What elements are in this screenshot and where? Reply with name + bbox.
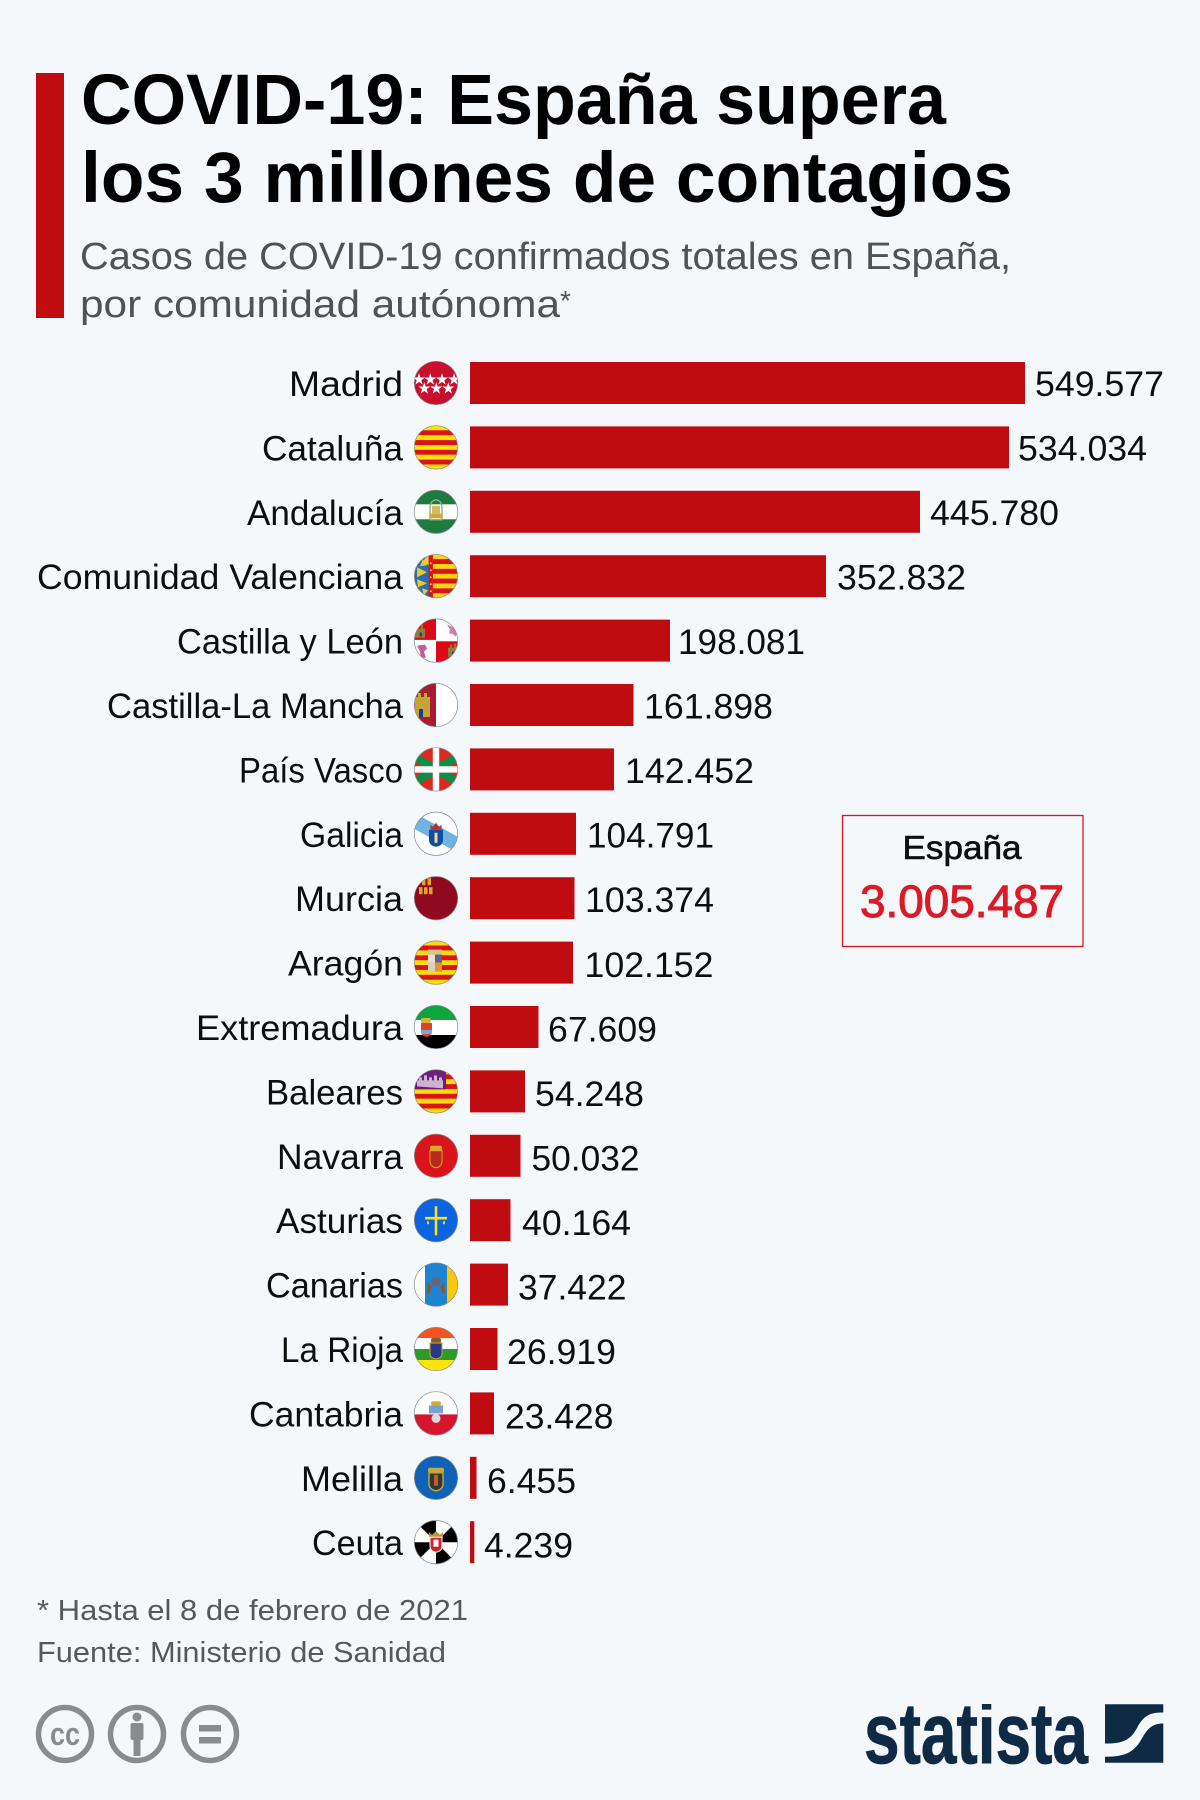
row: Asturias: [276, 1198, 631, 1243]
row: La Rioja: [281, 1327, 616, 1372]
bar: Castilla-La Mancha: [470, 684, 634, 726]
value: Cataluña: 534.034: [1018, 430, 1147, 468]
subtitle: por comunidad autónoma: [80, 284, 561, 326]
value: Galicia: 104.791: [587, 817, 714, 856]
value: Cantabria: 23.428: [505, 1398, 614, 1436]
label: Aragón: Aragón: [288, 945, 403, 984]
label: Cataluña: Cataluña: [262, 429, 404, 468]
icon: creative commons licence: [38, 1708, 236, 1760]
bar: Extremadura: [470, 1006, 538, 1048]
label: Comunidad Valenciana: Comunidad Valenciana: [37, 558, 404, 597]
logo: statista: statista: [864, 1686, 1089, 1782]
title: los 3 millones de contagios: [81, 139, 1013, 218]
row: Canarias: [266, 1263, 626, 1307]
bar: Galicia: [470, 813, 576, 855]
icon: flag of Baleares: [414, 1069, 458, 1113]
icon: flag of Madrid: [413, 361, 460, 405]
footnote and source: * Hasta el 8 de febrero de 2021: [37, 1595, 468, 1627]
subtitle: [80, 236, 1011, 326]
icon: flag of Murcia: [414, 876, 458, 920]
bar: Andalucía: [470, 491, 920, 533]
callout: España total: España: [902, 829, 1022, 866]
label: Baleares: Baleares: [266, 1073, 403, 1112]
bar: La Rioja: [470, 1328, 498, 1370]
bar: Castilla y León: [470, 620, 670, 662]
subtitle: Casos de COVID-19 confirmados totales en España,: [80, 236, 1011, 278]
icon: flag of Asturias: [414, 1198, 458, 1242]
icon: flag of Comunidad Valenciana: [414, 554, 459, 598]
value: La Rioja: 26.919: [507, 1333, 616, 1372]
label: Ceuta: Ceuta: [312, 1524, 404, 1563]
row: Cataluña: [262, 425, 1147, 469]
bar: Ceuta: [470, 1521, 474, 1563]
bar: Cantabria: [470, 1392, 494, 1434]
label: Extremadura: Extremadura: [196, 1009, 404, 1048]
row: Extremadura: [196, 1005, 657, 1049]
value: Baleares: 54.248: [535, 1075, 644, 1114]
row: Baleares: [266, 1069, 644, 1114]
bar: Navarra: [470, 1135, 520, 1177]
icon: flag of Ceuta: [414, 1520, 458, 1564]
label: Andalucía: Andalucía: [247, 494, 404, 533]
label: Madrid: Madrid: [289, 365, 403, 404]
callout: España total: [842, 816, 1083, 946]
icon: flag of Canarias: [414, 1263, 458, 1307]
label: Galicia: Galicia: [300, 816, 404, 855]
value: Castilla y León: 198.081: [678, 623, 805, 662]
value: Ceuta: 4.239: [484, 1526, 573, 1566]
icon: flag of Extremadura: [414, 1005, 458, 1049]
icon: flag of La Rioja: [414, 1327, 458, 1371]
icon: flag of Cataluña: [414, 425, 458, 469]
row: Murcia: [295, 876, 714, 920]
icon: flag of Andalucía: [414, 490, 458, 534]
icon: creative commons licence: cc: [50, 1716, 80, 1752]
label: Castilla y León: Castilla y León: [177, 623, 403, 662]
value: Andalucía: 445.780: [930, 494, 1059, 533]
row: Galicia: [300, 812, 714, 856]
value: Asturias: 40.164: [522, 1204, 631, 1243]
title: COVID-19: España supera: [81, 61, 946, 140]
value: Aragón: 102.152: [584, 946, 714, 985]
callout: España total: 3.005.487: [860, 876, 1064, 927]
label: Castilla-La Mancha: Castilla-La Mancha: [107, 687, 404, 726]
bar: Madrid: [470, 362, 1025, 404]
value: Castilla-La Mancha: 161.898: [644, 688, 773, 727]
label: Asturias: Asturias: [276, 1202, 403, 1241]
label: Navarra: Navarra: [277, 1138, 404, 1177]
value: País Vasco: 142.452: [625, 752, 754, 791]
value: Canarias: 37.422: [518, 1268, 626, 1307]
bar: Comunidad Valenciana: [470, 555, 826, 597]
row: Melilla: [301, 1456, 576, 1501]
icon: flag of Galicia: [414, 812, 458, 856]
value: Madrid: 549.577: [1035, 365, 1164, 404]
label: Murcia: Murcia: [295, 880, 404, 919]
row: Navarra: [277, 1134, 640, 1178]
row: Madrid: [289, 361, 1164, 405]
icon: flag of Melilla: [414, 1456, 458, 1500]
value: Murcia: 103.374: [585, 881, 714, 920]
icon: flag of Navarra: [414, 1134, 458, 1178]
title accent bar: [36, 73, 64, 318]
bar: Murcia: [470, 877, 574, 919]
footnote and source: [37, 1595, 468, 1669]
label: Cantabria: Cantabria: [249, 1395, 404, 1434]
bar chart: [37, 361, 1164, 1566]
icon: flag of Cantabria: [414, 1391, 458, 1435]
icon: flag of Castilla y León: [414, 619, 458, 663]
footnote and source: Fuente: Ministerio de Sanidad: [37, 1637, 446, 1669]
bar: Melilla: [470, 1457, 476, 1499]
row: Castilla-La Mancha: [107, 683, 773, 727]
row: Castilla y León: [177, 619, 805, 663]
row: País Vasco: [239, 747, 754, 791]
subtitle: *: [560, 285, 571, 316]
row: Ceuta: [312, 1520, 573, 1566]
bar: Aragón: [470, 942, 573, 984]
label: País Vasco: País Vasco: [239, 751, 403, 790]
label: Canarias: Canarias: [266, 1267, 403, 1306]
bar: Cataluña: [470, 426, 1009, 468]
icon: flag of País Vasco: [414, 747, 458, 791]
bar: País Vasco: [470, 748, 614, 790]
logo: statista: [866, 1704, 1164, 1764]
label: Melilla: Melilla: [301, 1460, 404, 1499]
row: Cantabria: [249, 1391, 614, 1436]
value: Extremadura: 67.609: [548, 1010, 657, 1049]
title: [81, 61, 1013, 218]
icon: flag of Castilla-La Mancha: [414, 683, 458, 727]
icon: flag of Aragón: [414, 941, 458, 985]
label: La Rioja: La Rioja: [281, 1331, 403, 1370]
bar: Baleares: [470, 1070, 525, 1112]
value: Comunidad Valenciana: 352.832: [837, 559, 966, 598]
row: Andalucía: [247, 490, 1059, 534]
bar: Asturias: [470, 1199, 510, 1241]
bar: Canarias: [470, 1264, 508, 1306]
row: Comunidad Valenciana: [37, 554, 966, 598]
value: Navarra: 50.032: [532, 1139, 640, 1178]
value: Melilla: 6.455: [487, 1462, 576, 1501]
row: Aragón: [288, 941, 714, 985]
